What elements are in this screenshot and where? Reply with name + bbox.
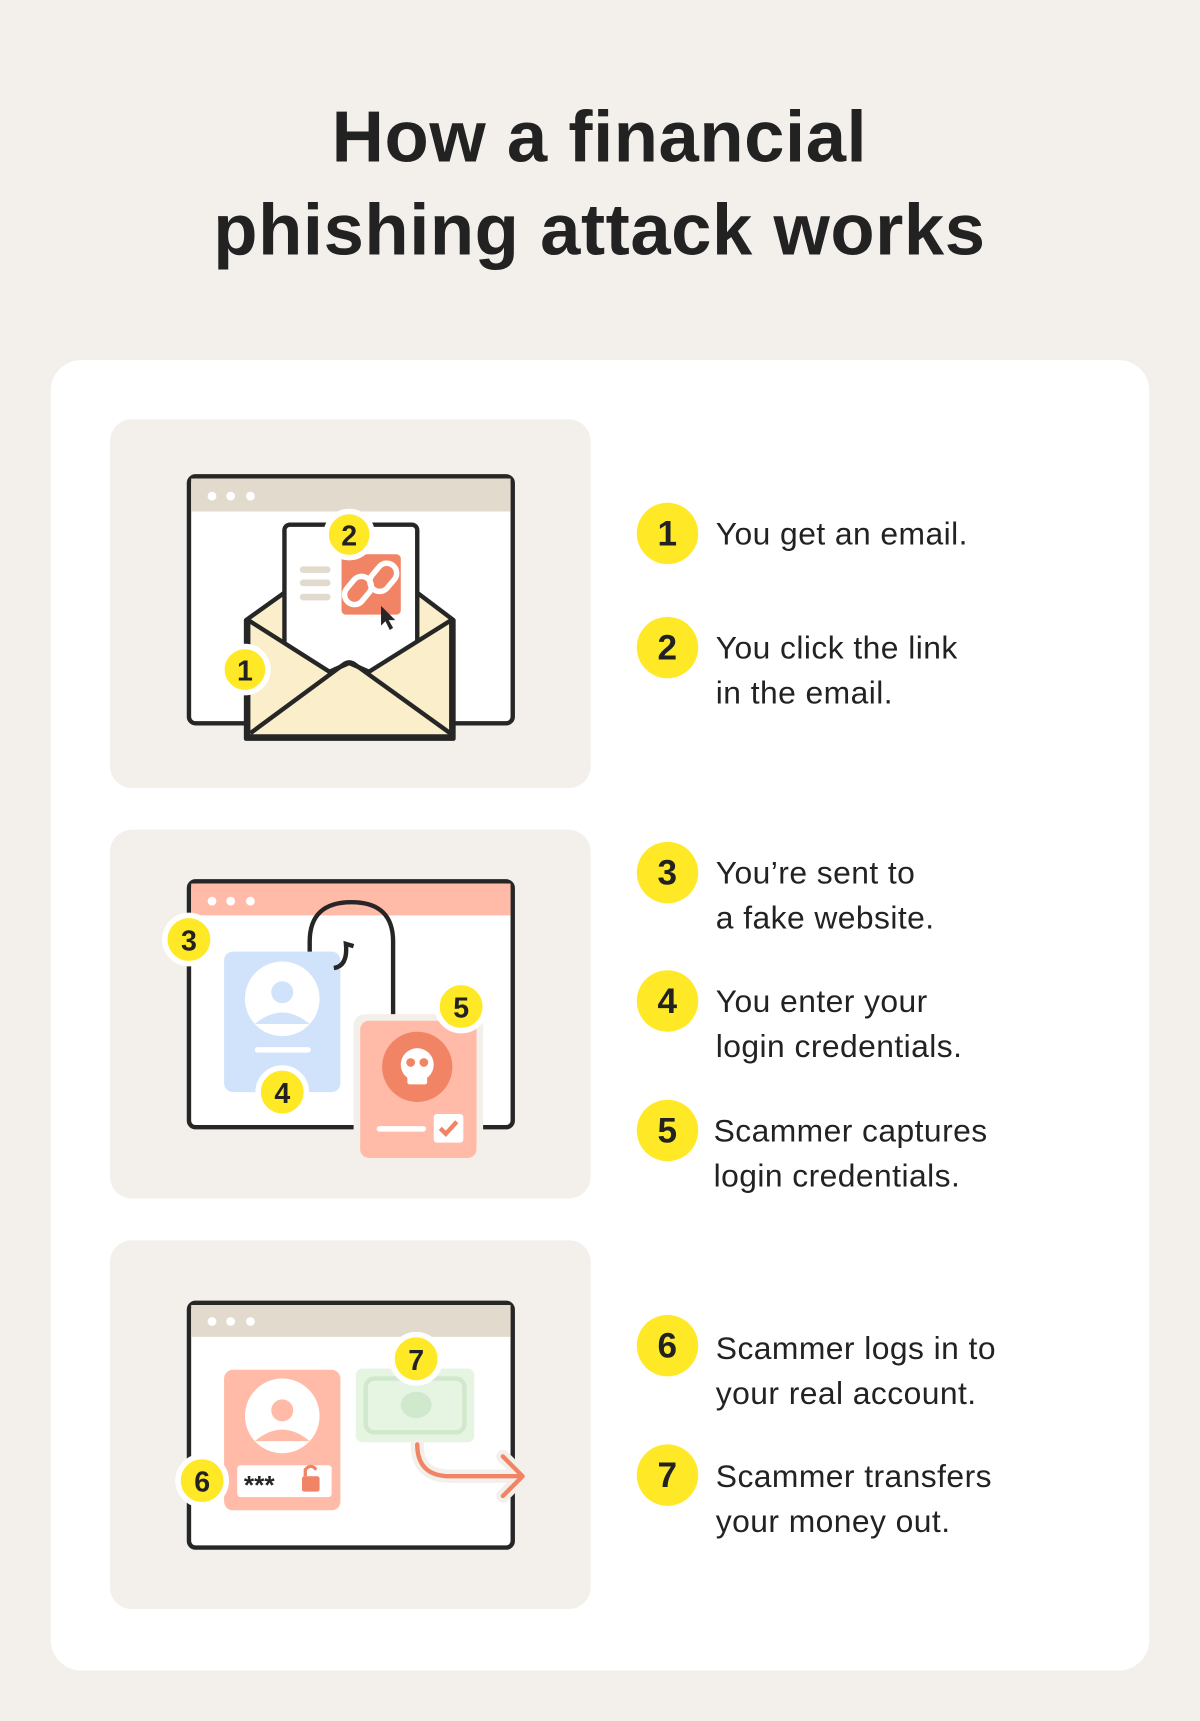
step 7: 7 (658, 1456, 677, 1495)
step 5: login credentials. (714, 1157, 960, 1193)
badge 4 illus: 4 (274, 1078, 290, 1110)
badge 6 illus (178, 1456, 226, 1505)
step 2: in the email. (716, 675, 893, 711)
step 4: 4 (658, 982, 678, 1021)
step 3: a fake website. (716, 900, 935, 936)
step 4: You enter your (716, 983, 928, 1019)
step 2: 2 (658, 629, 677, 668)
step 1: 1 (658, 514, 677, 553)
step 4 (637, 970, 962, 1064)
panel 1: email (110, 419, 591, 788)
envelope with letter (246, 525, 453, 739)
browser window 2 (189, 881, 513, 1127)
step 2 (637, 617, 958, 711)
browser window 1 (189, 476, 513, 723)
browser window 3 (189, 1303, 513, 1548)
panel 2: fake site (110, 830, 591, 1199)
step 1: You get an email. (716, 515, 968, 551)
step 4: login credentials. (716, 1028, 962, 1064)
panel 3: real account (110, 1240, 591, 1609)
transfer arrow (417, 1444, 523, 1496)
badge 5 illus (437, 982, 485, 1031)
badge 7 illus: 7 (408, 1345, 424, 1377)
blue login card (224, 952, 340, 1092)
step 3: 3 (658, 854, 677, 893)
step 6 (637, 1315, 996, 1411)
step 7 (637, 1444, 992, 1539)
badge 7 illus (392, 1335, 440, 1383)
red skull card (354, 1014, 483, 1165)
step 5: Scammer captures (714, 1112, 988, 1148)
card (51, 360, 1149, 1671)
title (213, 96, 986, 271)
badge 1 illus: 1 (237, 655, 253, 687)
badge 6 illus: 6 (194, 1467, 210, 1499)
badge 1 illus (222, 646, 268, 693)
badge 5 illus: 5 (453, 992, 469, 1024)
pink account card: *** (244, 1470, 275, 1500)
badge 2 illus (326, 511, 372, 558)
badge 4 illus (258, 1068, 306, 1116)
title: phishing attack works (213, 190, 986, 271)
badge 3 illus: 3 (181, 926, 197, 958)
step 6: your real account. (716, 1375, 977, 1411)
money bill (356, 1369, 474, 1442)
title: How a financial (332, 96, 867, 177)
step 6: Scammer logs in to (716, 1330, 996, 1366)
step 5 (637, 1100, 988, 1193)
step 1 (637, 503, 968, 564)
step 3: You’re sent to (716, 855, 915, 891)
badge 3 illus (165, 915, 213, 964)
pink account card (224, 1370, 340, 1510)
step 2: You click the link (716, 630, 958, 666)
step 7: your money out. (716, 1503, 950, 1539)
step 6: 6 (658, 1327, 677, 1366)
step 5: 5 (658, 1112, 677, 1151)
redirect arrow (310, 902, 393, 1026)
step 3 (637, 842, 935, 936)
step 7: Scammer transfers (716, 1458, 992, 1494)
steps list (637, 503, 996, 1539)
badge 2 illus: 2 (341, 520, 357, 552)
